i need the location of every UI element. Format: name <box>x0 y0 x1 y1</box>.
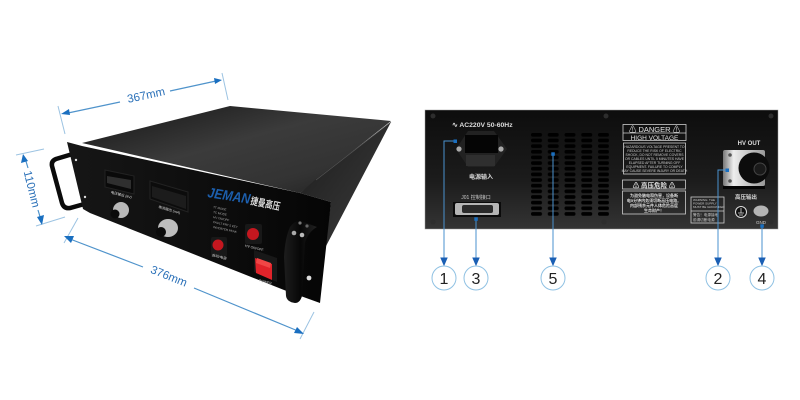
brand logo: 捷曼高压 <box>249 194 281 213</box>
Chinese high voltage warning label: 生命财产！ <box>644 207 664 213</box>
dimension: 110mm height <box>16 149 65 226</box>
knob: voltage <box>110 202 129 218</box>
status indicators: TC MODE <box>213 210 227 217</box>
right handle <box>284 221 317 303</box>
panel screws <box>75 159 86 198</box>
Chinese high voltage warning label: ⚠ 高压危险 ⚠ <box>633 180 676 190</box>
dimension: 367mm width <box>58 73 228 134</box>
callout 3: control port <box>464 217 488 290</box>
button: start/reset: 启动/电源 <box>211 252 228 261</box>
front view: power supply chassis <box>52 106 391 303</box>
callout 2: HV output <box>706 168 730 290</box>
display: voltage meter: 电压输出 (kV) <box>110 190 132 200</box>
button: HV output: HV ON/OFF <box>245 244 264 252</box>
HV output connector: HV OUT <box>738 141 761 147</box>
Chinese high voltage warning label <box>622 180 686 214</box>
brand logo: JEMAN <box>207 184 252 207</box>
danger high voltage label <box>622 124 688 174</box>
AC input label: ∿ AC220V 50-60Hz <box>452 122 513 129</box>
button: start/reset <box>211 237 228 261</box>
AC input socket <box>456 131 507 181</box>
danger high voltage label: HIGH VOLTAGE <box>631 135 679 142</box>
callout 3: control port: 3 <box>472 271 481 288</box>
callout 5: ventilation: 5 <box>549 271 558 288</box>
brand logo <box>207 184 281 213</box>
danger high voltage label: REDUCE THE RISK OF ELECTRIC <box>627 149 682 153</box>
ventilation slots <box>531 133 609 216</box>
grounding warning label: 前请切断电源 <box>693 217 715 222</box>
Chinese high voltage warning label: 电5分钟内务须切断高压电路。 <box>627 197 681 203</box>
grounding warning label: 警告！电源接地 <box>693 212 719 217</box>
status indicators: HV ON/OFF <box>213 215 230 222</box>
callout 1: AC input <box>432 140 457 290</box>
HV output connector: 高压输出 <box>735 193 757 201</box>
power rocker switch: POWER <box>258 278 273 286</box>
danger high voltage label: SHOCK, DO NOT REMOVE COVERS <box>626 153 684 157</box>
chassis top cover <box>82 106 391 193</box>
ground terminal: GND <box>756 220 767 225</box>
grounding warning label: WARNING: THE <box>693 198 715 202</box>
danger high voltage label: OR CABLES UNTIL 5 MINUTES HAVE <box>625 157 685 161</box>
left handle <box>52 153 88 208</box>
knob: current <box>156 219 178 237</box>
danger high voltage label: MAY CAUSE SEVERE INJURY OR DEATH <box>622 169 688 173</box>
danger high voltage label: ⚠ DANGER ⚠ <box>629 125 681 134</box>
AC input socket: 电源输入 <box>469 173 493 181</box>
Chinese high voltage warning label: 为避免触电和伤害，设备断 <box>630 192 678 198</box>
grounding warning label: POWER SUPPLY <box>693 202 717 206</box>
dimension: 376mm depth <box>64 218 314 339</box>
dimension: 110mm height: 110mm <box>21 170 41 209</box>
corner screws <box>430 114 774 224</box>
display: current meter <box>150 181 188 215</box>
callout 4: ground: 4 <box>758 271 767 288</box>
chassis right side <box>300 122 391 248</box>
dimension: 367mm width: 367mm <box>126 86 166 106</box>
danger high voltage label: ELAPSED AFTER TURNING OFF <box>629 161 680 165</box>
status indicators <box>213 205 238 234</box>
ground terminal <box>736 206 768 225</box>
display: voltage meter <box>105 170 134 200</box>
HV output connector <box>723 141 770 201</box>
J01 control port <box>453 194 501 217</box>
power rocker switch <box>254 250 277 286</box>
callout 5: ventilation <box>541 152 565 290</box>
callout 1: AC input: 1 <box>440 271 449 288</box>
danger high voltage label: EQUIPMENT. FAILURE TO COMPLY <box>626 165 683 169</box>
J01 control port: J01 控制接口 <box>461 194 491 201</box>
status indicators: INVERTER PEAK <box>213 225 237 234</box>
grounding warning label: MUST BE GROUNDED <box>693 205 725 209</box>
grounding warning label <box>691 197 725 223</box>
status indicators: TT MODE <box>213 205 227 212</box>
rear view panel <box>425 110 778 229</box>
callout 2: HV output: 2 <box>714 271 723 288</box>
Chinese high voltage warning label: 内部残余元件人体危险高度 <box>630 202 678 208</box>
callout 4: ground <box>750 224 774 290</box>
display: current meter: 电流输出 (mA) <box>158 204 181 215</box>
dimension: 376mm depth: 376mm <box>149 264 189 290</box>
status indicators: FAULT PRT 5 KEY <box>213 220 238 229</box>
front panel <box>67 142 331 303</box>
button: HV output <box>245 224 264 252</box>
lid lip highlight <box>316 122 391 180</box>
danger high voltage label: HAZARDOUS VOLTAGE PRESENT TO <box>624 145 685 149</box>
